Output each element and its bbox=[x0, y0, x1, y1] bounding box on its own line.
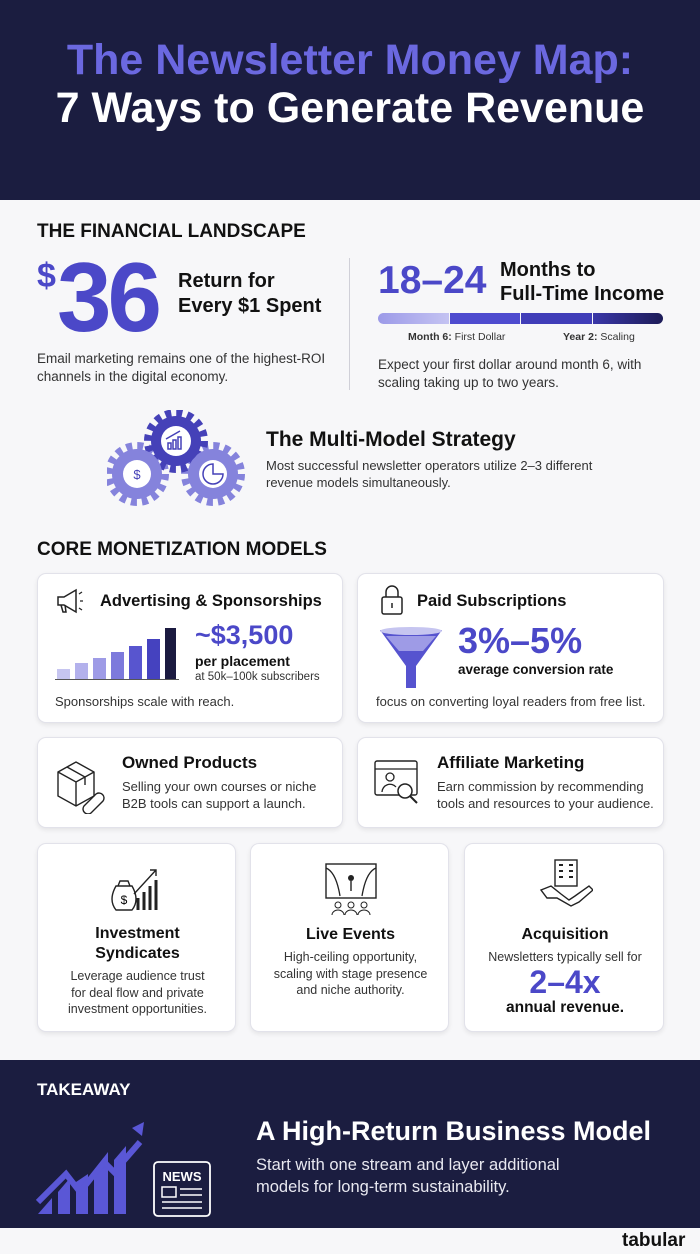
card: live events bbox=[250, 843, 449, 1032]
icon: gears bbox=[107, 410, 245, 506]
card: advertising: per placement bbox=[195, 653, 290, 669]
takeaway band: TAKEAWAY bbox=[37, 1080, 131, 1099]
card: investment syndicates bbox=[37, 843, 236, 1032]
text: multi-model strategy: Most successful newsletter operators utilize 2–3 different revenue models simultaneously. bbox=[266, 458, 592, 490]
text: expect first dollar: Expect your first dollar around month 6, with scaling taking up to two years. bbox=[378, 357, 641, 390]
section heading: core models: CORE MONETIZATION MODELS bbox=[37, 539, 327, 560]
text: high-return business model: models for long-term sustainability. bbox=[256, 1178, 510, 1196]
icon: stage bbox=[325, 863, 377, 915]
card: investment syndicates: Investment bbox=[95, 925, 180, 942]
header band bbox=[0, 0, 700, 200]
card: investment syndicates: Syndicates bbox=[95, 945, 180, 962]
card: affiliate: Affiliate Marketing bbox=[437, 753, 584, 772]
card: acquisition: Newsletters typically sell for bbox=[488, 950, 642, 964]
title: 7 Ways to Generate Revenue bbox=[56, 84, 644, 132]
text: multi-model strategy bbox=[266, 428, 592, 490]
stat: 18-24 months bbox=[378, 259, 664, 305]
icon: growth chart with news: NEWS bbox=[162, 1169, 202, 1184]
card: live events: and niche authority. bbox=[296, 983, 405, 997]
timeline bar: Year 2: Scaling bbox=[563, 331, 635, 343]
timeline bar bbox=[378, 313, 663, 343]
icon: handshake building bbox=[540, 859, 593, 907]
card: advertising: Sponsorships scale with reach. bbox=[55, 694, 234, 709]
text: high-return business model: Start with one stream and layer additional bbox=[256, 1156, 560, 1174]
card: acquisition: Acquisition bbox=[521, 926, 609, 943]
text: high-return business model bbox=[256, 1116, 651, 1196]
card: live events: scaling with stage presence bbox=[274, 966, 427, 980]
icon: padlock bbox=[381, 585, 403, 615]
text: multi-model strategy: The Multi-Model Strategy bbox=[266, 428, 516, 451]
card: affiliate: tools and resources to your audience. bbox=[437, 796, 654, 811]
card: advertising: Advertising & Sponsorships bbox=[100, 592, 322, 610]
section heading: financial landscape: THE FINANCIAL LANDSCAPE bbox=[37, 221, 306, 242]
stat: $36 bbox=[37, 242, 322, 352]
card: paid subscriptions: average conversion rate bbox=[458, 662, 613, 677]
card: owned products: Selling your own courses or niche bbox=[122, 779, 316, 794]
card: owned products: B2B tools can support a launch. bbox=[122, 796, 306, 811]
card: affiliate bbox=[357, 737, 664, 828]
icon: growth chart with news bbox=[36, 1122, 211, 1217]
card: owned products bbox=[37, 737, 343, 828]
card: investment syndicates: investment opportunities. bbox=[68, 1002, 207, 1016]
card: acquisition: annual revenue. bbox=[506, 999, 624, 1016]
text: email roi: Email marketing remains one of the highest-ROI channels in the digital economy. bbox=[37, 351, 325, 384]
icon: box and link bbox=[57, 761, 105, 814]
logo: tabular: tabular bbox=[622, 1230, 685, 1251]
card: owned products: Owned Products bbox=[122, 753, 257, 772]
icon: money bag chart bbox=[111, 869, 158, 911]
card: affiliate: Earn commission by recommending bbox=[437, 779, 644, 794]
card: paid subscriptions bbox=[357, 573, 664, 723]
icon: megaphone bbox=[57, 588, 83, 614]
card: paid subscriptions: 3%–5% bbox=[458, 620, 582, 661]
card: investment syndicates: for deal flow and private bbox=[71, 986, 204, 1000]
icon: money bag chart: $ bbox=[121, 893, 128, 907]
card: paid subscriptions: focus on converting loyal readers from free list. bbox=[376, 694, 646, 709]
title bbox=[56, 36, 644, 132]
stat: 18-24 months: Full-Time Income bbox=[500, 283, 664, 305]
stat: 18-24 months: Months to bbox=[500, 259, 596, 281]
card: advertising bbox=[37, 573, 343, 723]
icon: browser search bbox=[374, 760, 418, 804]
timeline bar: Month 6: First Dollar bbox=[408, 331, 505, 343]
stat: 18-24 months: 18–24 bbox=[378, 259, 486, 302]
bar chart bbox=[55, 628, 179, 680]
icon: funnel bbox=[380, 627, 442, 688]
card: investment syndicates: Leverage audience trust bbox=[70, 969, 205, 983]
card: live events: High-ceiling opportunity, bbox=[284, 950, 417, 964]
card: acquisition: 2–4x bbox=[529, 964, 601, 1000]
text: high-return business model: A High-Return Business Model bbox=[256, 1116, 651, 1146]
card: paid subscriptions: Paid Subscriptions bbox=[417, 592, 566, 610]
stat: $36: Every $1 Spent bbox=[178, 295, 321, 317]
card: advertising: at 50k–100k subscribers bbox=[195, 671, 320, 683]
card: advertising: ~$3,500 bbox=[195, 620, 293, 650]
takeaway band bbox=[0, 1060, 700, 1228]
card: live events: Live Events bbox=[306, 926, 395, 943]
stat: $36: $ bbox=[37, 257, 56, 295]
stat: $36: Return for bbox=[178, 270, 275, 292]
title: The Newsletter Money Map: bbox=[67, 36, 633, 84]
stat: $36: 36 bbox=[57, 242, 158, 352]
icon: gears: $ bbox=[133, 467, 141, 482]
card: acquisition bbox=[464, 843, 664, 1032]
